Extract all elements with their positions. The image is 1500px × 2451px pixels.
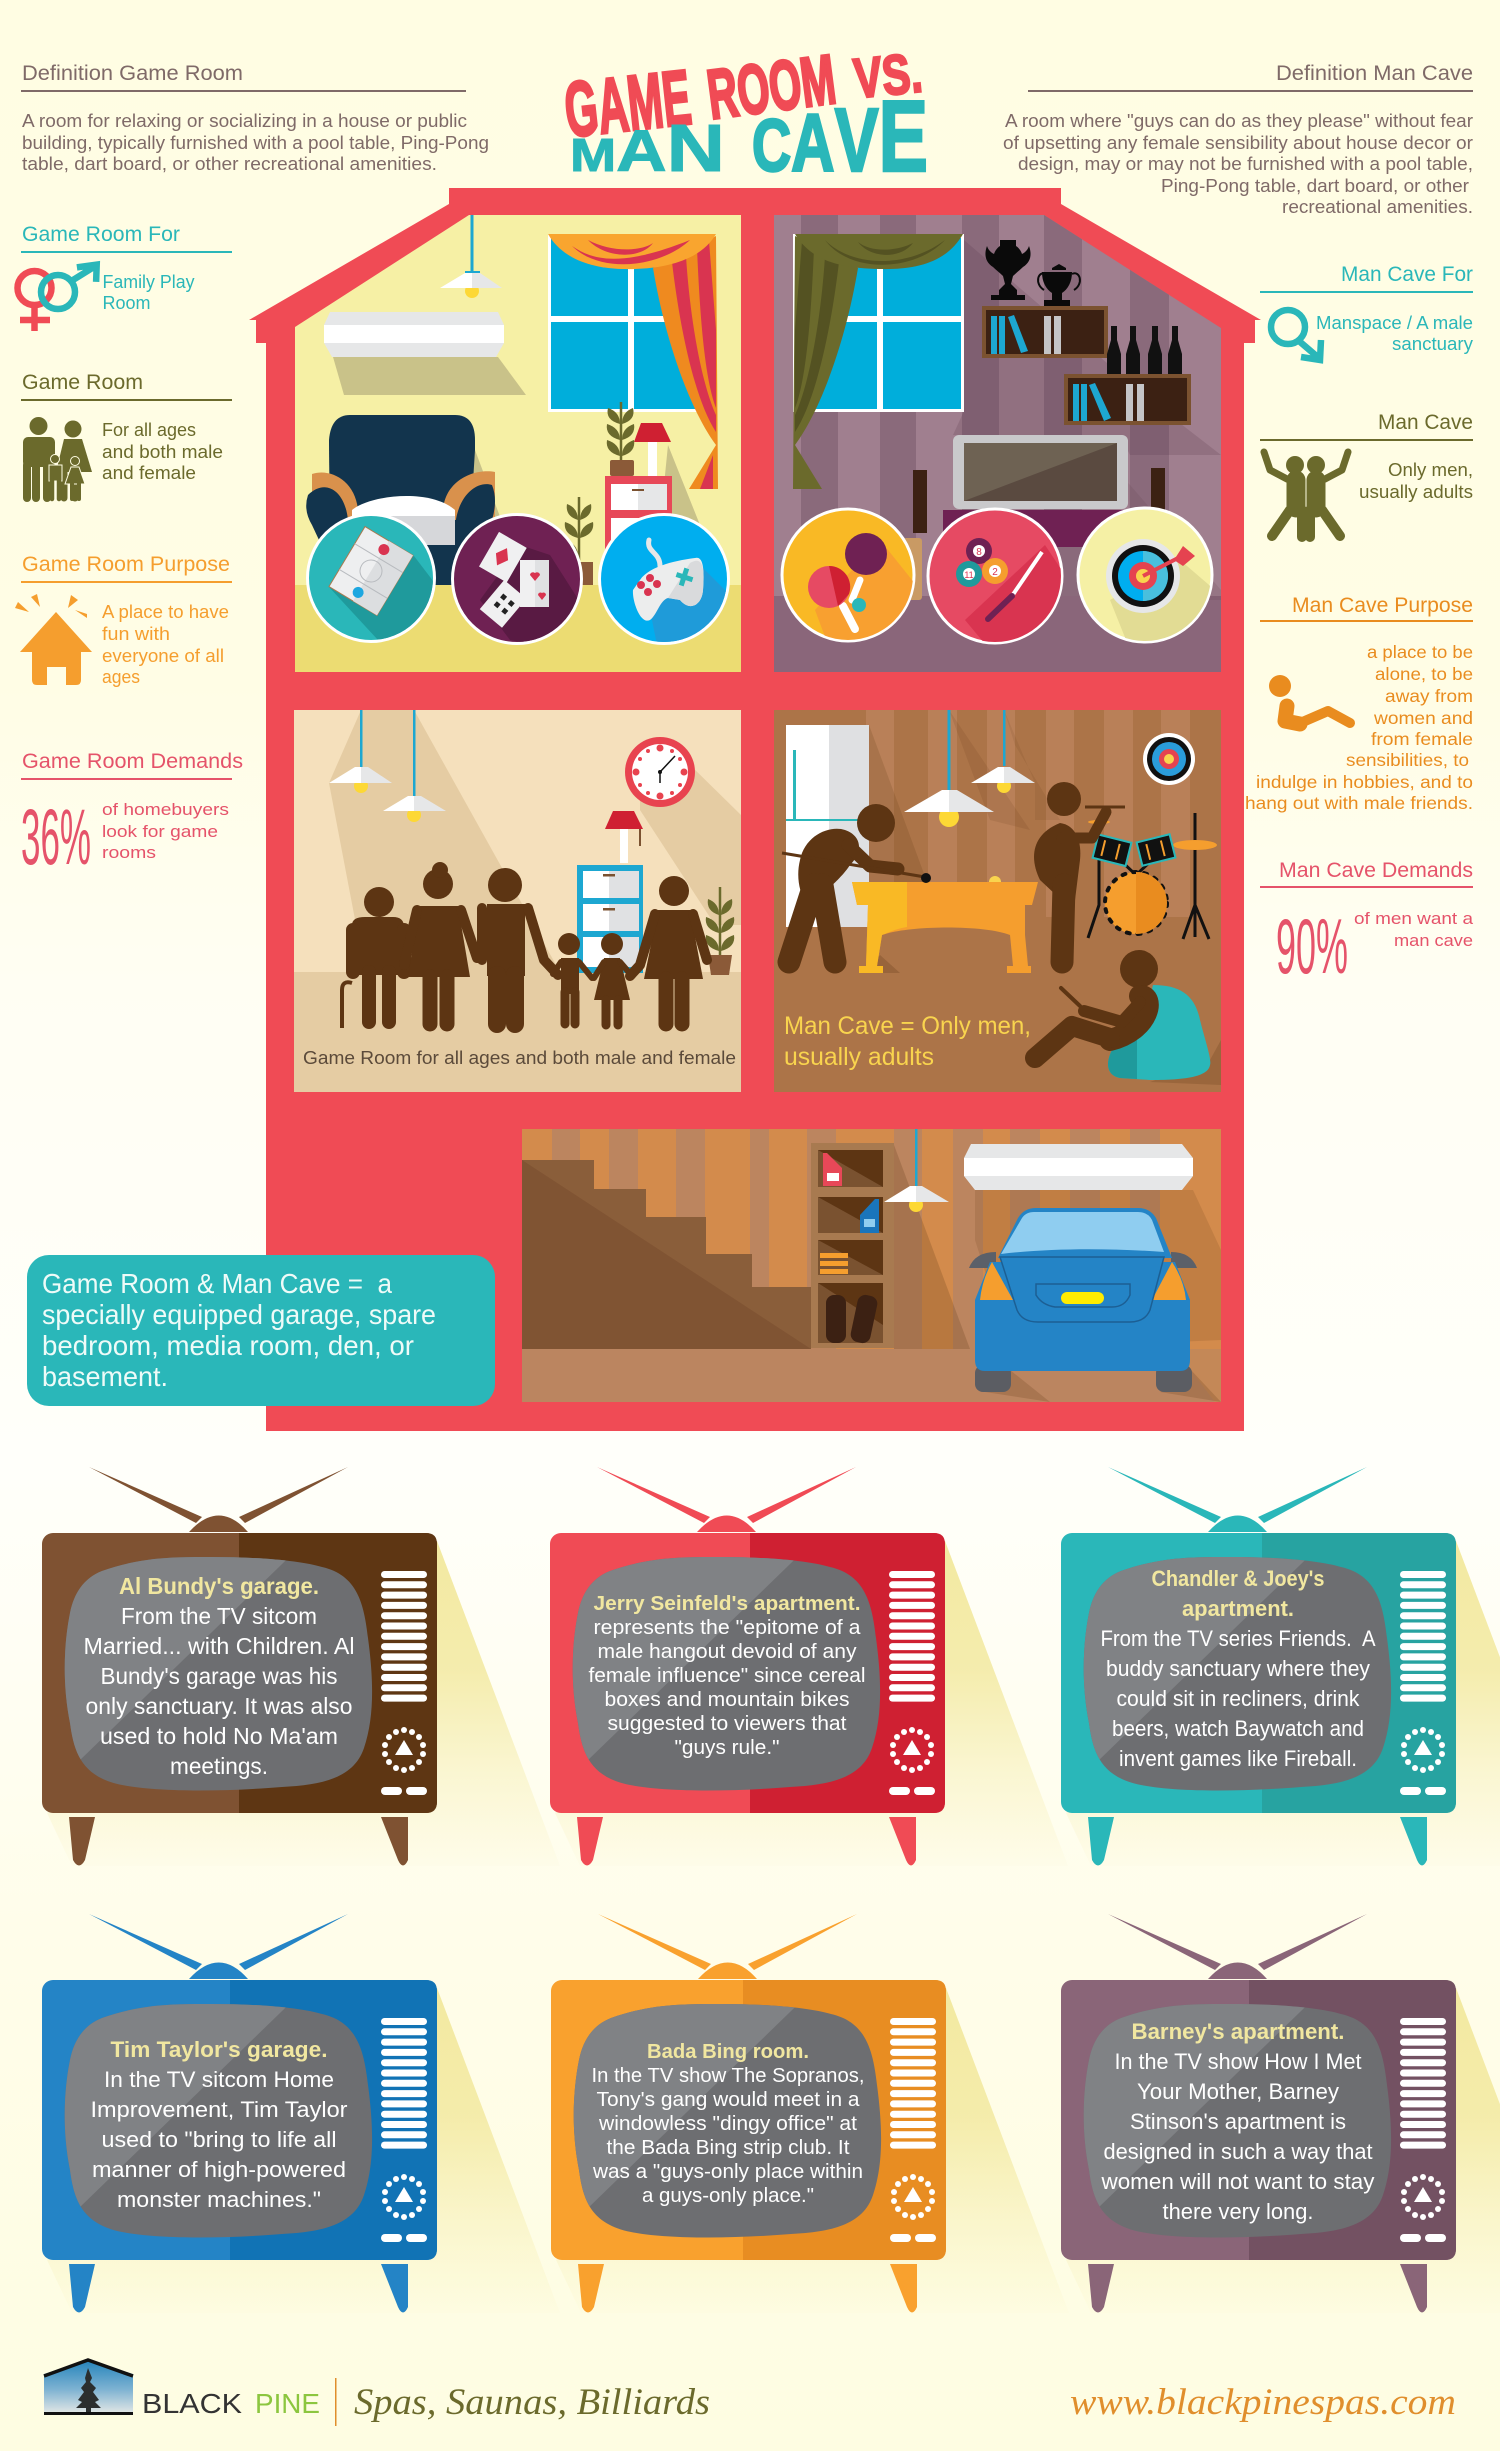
footer divider <box>335 2378 336 2426</box>
tv: Bada Bing: Tony's gang would meet in a <box>596 2088 860 2111</box>
pool table <box>852 876 1038 973</box>
room: man cave lounge <box>774 215 1221 672</box>
panel: man cave purpose: hang out with male friends. <box>1245 793 1473 813</box>
curtain <box>793 234 963 489</box>
tv: Al Bundy: used to hold No Ma'am <box>100 1723 338 1749</box>
bottles <box>1107 326 1182 375</box>
panel: man cave audience: usually adults <box>1359 482 1473 502</box>
tv: Jerry Seinfeld: represents the "epitome of a <box>594 1616 861 1639</box>
title: ROOM <box>703 40 840 134</box>
car <box>969 1208 1197 1392</box>
tv: Al Bundy: Married... with Children. Al <box>84 1633 355 1659</box>
panel: definition man cave <box>1003 62 1473 217</box>
panel: man cave audience: Only men, <box>1388 460 1473 480</box>
panel: man cave purpose: indulge in hobbies, and to <box>1256 772 1473 792</box>
tv: Tim Taylor: used to "bring to life all <box>102 2127 336 2152</box>
title: CAVE <box>752 81 928 193</box>
family silhouettes <box>342 862 707 1028</box>
badge: billiards: 8 <box>976 547 982 558</box>
man throwing dart <box>1034 782 1125 962</box>
tv: Al Bundy <box>42 1467 560 1866</box>
icon: house with rays <box>15 594 92 685</box>
panel: game room for <box>18 222 232 331</box>
armchair <box>306 415 505 585</box>
panel: game room audience: and female <box>102 463 196 483</box>
tv: Chandler and Joey: could sit in recliners, drink <box>1116 1686 1360 1711</box>
curtain <box>548 234 718 489</box>
floor plant <box>565 497 593 585</box>
title <box>560 40 928 193</box>
badge: game controller <box>598 513 730 645</box>
badge: playing cards <box>452 514 585 650</box>
man playing pool <box>782 804 931 962</box>
tv: Bada Bing: was a "guys-only place within <box>592 2160 863 2183</box>
tv: Barney: In the TV show How I Met <box>1114 2049 1362 2074</box>
panel: definition game room <box>21 62 489 174</box>
tv: Al Bundy: only sanctuary. It was also <box>86 1693 352 1719</box>
tv: Barney: there very long. <box>1162 2199 1314 2224</box>
window <box>548 234 713 412</box>
tv: Bada Bing: the Bada Bing strip club. It <box>606 2136 850 2159</box>
tv: Al Bundy: From the TV sitcom <box>121 1603 317 1629</box>
wall air conditioner <box>324 312 526 395</box>
tv: Bada Bing: In the TV show The Sopranos, <box>592 2064 864 2087</box>
tv: Barney: Your Mother, Barney <box>1137 2079 1339 2104</box>
panel: definition game room: Definition Game Room <box>22 62 243 85</box>
panel: man cave purpose: women and <box>1373 708 1473 728</box>
tv: Jerry Seinfeld: "guys rule." <box>674 1736 780 1759</box>
panel: game room audience: Game Room <box>22 370 143 394</box>
plant <box>706 887 734 975</box>
panel: definition game room: table, dart board, or other recreational amenities. <box>22 154 437 174</box>
room: game room with lounge <box>295 215 741 672</box>
tv: Jerry Seinfeld: female influence" since cereal <box>588 1664 866 1687</box>
caption: Man Cave = Only men, <box>784 1012 1031 1040</box>
panel: game room demands: of homebuyers <box>102 800 229 819</box>
tv: Jerry Seinfeld: suggested to viewers that <box>608 1712 847 1735</box>
tv: Al Bundy: Al Bundy's garage. <box>119 1573 319 1599</box>
room: man cave activities <box>774 710 1221 1092</box>
window <box>793 234 964 412</box>
panel: man cave for: Man Cave For <box>1341 262 1473 286</box>
tv: Jerry Seinfeld: male hangout devoid of any <box>598 1640 857 1663</box>
panel: game room demands: 36% <box>21 792 91 881</box>
wall shelf with books <box>984 308 1106 356</box>
footer logo <box>44 2360 320 2419</box>
badge: billiards: 11 <box>964 570 974 580</box>
callout: basement. <box>42 1361 168 1392</box>
tv: Chandler and Joey: buddy sanctuary where they <box>1106 1656 1370 1681</box>
icon: gender symbols <box>18 265 99 331</box>
cabinet and lamp <box>577 811 643 973</box>
panel: man cave demands: of men want a <box>1354 909 1474 928</box>
tv: Tim Taylor: Improvement, Tim Taylor <box>90 2097 348 2122</box>
panel: man cave purpose: sensibilities, to <box>1346 750 1469 770</box>
panel: game room audience <box>21 370 232 499</box>
tv: Bada Bing: a guys-only place." <box>642 2184 814 2207</box>
panel: definition man cave: recreational amenities. <box>1282 197 1473 217</box>
panel: game room audience: For all ages <box>102 420 196 440</box>
panel: game room for: Room <box>102 293 150 313</box>
tv: Barney: women will not want to stay <box>1100 2169 1374 2194</box>
badge: air hockey <box>306 516 436 643</box>
panel: man cave purpose: a place to be <box>1367 642 1473 662</box>
tv: Barney <box>1061 1914 1500 2313</box>
panel: game room demands <box>21 750 243 881</box>
tv: Tim Taylor: manner of high-powered <box>92 2157 346 2182</box>
badge: billiards: 2 <box>992 567 998 578</box>
tv: Barney: designed in such a way that <box>1104 2139 1372 2164</box>
panel: definition man cave: Ping-Pong table, dart board, or other <box>1161 176 1469 196</box>
tv: Al Bundy: Bundy's garage was his <box>100 1663 338 1689</box>
panel: game room demands: rooms <box>102 843 156 862</box>
panel: man cave for: Manspace / A male <box>1316 313 1473 333</box>
panel: man cave purpose: Man Cave Purpose <box>1292 593 1473 617</box>
panel: definition man cave: Definition Man Cave <box>1276 62 1473 85</box>
tv: Barney: Barney's apartment. <box>1132 2019 1344 2044</box>
wall shelf lower <box>1066 376 1189 423</box>
tv: Tim Taylor: In the TV sitcom Home <box>104 2067 334 2092</box>
footer logo: PINE <box>255 2388 320 2419</box>
panel: game room purpose: everyone of all <box>102 646 224 666</box>
panel: game room for: Game Room For <box>22 222 180 246</box>
shelving unit <box>811 1143 894 1348</box>
callout: specially equipped garage, spare <box>42 1299 436 1330</box>
television and speakers <box>903 435 1165 600</box>
tv: Jerry Seinfeld: Jerry Seinfeld's apartment. <box>594 1592 860 1615</box>
callout: Game Room & Man Cave = a <box>42 1268 393 1299</box>
panel: definition game room: A room for relaxing or socializing in a house or public <box>22 111 467 131</box>
callout <box>27 1255 495 1406</box>
lamps <box>329 710 446 822</box>
footer tagline: Spas, Saunas, Billiards <box>354 2382 710 2423</box>
badge: dartboard <box>1078 508 1215 650</box>
tv: Bada Bing: Bada Bing room. <box>647 2040 809 2063</box>
tv: Chandler and Joey <box>1061 1467 1500 1866</box>
icon: family <box>23 417 92 499</box>
dartboard <box>1143 733 1195 785</box>
tv: Chandler and Joey: invent games like Fireball. <box>1119 1746 1357 1771</box>
tv: Bada Bing: windowless "dingy office" at <box>598 2112 857 2135</box>
house <box>249 188 1261 1431</box>
panel: man cave purpose <box>1245 593 1473 813</box>
panel: definition man cave: of upsetting any female sensibility about house decor or <box>1003 133 1473 153</box>
caption: Game Room for all ages and both male and female <box>303 1047 736 1068</box>
icon: male symbol pointing down <box>1271 310 1321 360</box>
tv: Tim Taylor: monster machines." <box>117 2187 321 2212</box>
tv: Jerry Seinfeld: boxes and mountain bikes <box>604 1688 850 1711</box>
tv: Jerry Seinfeld <box>550 1467 1068 1866</box>
room: family game room <box>294 710 741 1092</box>
tv: Chandler and Joey: apartment. <box>1182 1596 1294 1621</box>
tv: Tim Taylor: Tim Taylor's garage. <box>110 2037 328 2062</box>
side table with lamp and plant <box>605 402 700 550</box>
panel: game room demands: Game Room Demands <box>22 750 243 773</box>
panel: game room for: Family Play <box>102 272 194 292</box>
panel: definition game room: building, typically furnished with a pool table, Ping-Pong <box>22 133 489 153</box>
tv: Tim Taylor <box>42 1914 560 2313</box>
footer website: www.blackpinespas.com <box>1070 2382 1456 2423</box>
refrigerator <box>786 725 869 927</box>
icon: two men <box>1264 452 1348 537</box>
wall clock <box>625 737 695 807</box>
hanging lamps <box>904 710 1035 827</box>
panel: game room purpose <box>15 552 232 687</box>
panel: man cave audience <box>1260 410 1473 537</box>
badge: billiards <box>928 509 1075 650</box>
panel: man cave demands: Man Cave Demands <box>1279 859 1473 882</box>
panel: game room purpose: ages <box>102 667 140 687</box>
panel: man cave demands <box>1260 859 1474 990</box>
badge: ping pong <box>782 509 920 650</box>
panel: game room purpose: fun with <box>102 624 170 644</box>
panel: man cave purpose: away from <box>1385 686 1473 706</box>
panel: definition man cave: design, may or may not be furnished with a pool table, <box>1018 154 1473 174</box>
caption: usually adults <box>784 1043 934 1071</box>
trophies <box>985 240 1080 308</box>
panel: game room audience: and both male <box>102 442 223 462</box>
title: GAME <box>560 53 695 154</box>
room: garage <box>522 1129 1221 1402</box>
tv: Chandler and Joey: beers, watch Baywatch and <box>1112 1716 1364 1741</box>
garage door box <box>964 1144 1193 1190</box>
tv: Chandler and Joey: Chandler & Joey's <box>1152 1566 1324 1591</box>
panel: man cave demands: 90% <box>1276 902 1348 990</box>
title: MAN <box>570 111 725 186</box>
title: VS. <box>851 40 925 110</box>
hanging lamp <box>884 1129 949 1212</box>
panel: man cave purpose: from female <box>1371 729 1473 749</box>
bean bag and seated man <box>1035 950 1221 1085</box>
panel: man cave for: sanctuary <box>1392 334 1473 354</box>
tv: Barney: Stinson's apartment is <box>1130 2109 1346 2134</box>
panel: man cave demands: man cave <box>1394 931 1473 950</box>
panel: game room purpose: A place to have <box>102 602 229 622</box>
panel: man cave purpose: alone, to be <box>1375 664 1473 684</box>
panel: game room purpose: Game Room Purpose <box>22 552 230 576</box>
panel: definition man cave: A room where "guys can do as they please" without fear <box>1005 111 1473 131</box>
caption <box>784 1012 1031 1071</box>
tv: Al Bundy: meetings. <box>170 1753 268 1779</box>
callout: bedroom, media room, den, or <box>42 1330 414 1361</box>
panel: man cave audience: Man Cave <box>1378 410 1473 434</box>
panel: man cave for <box>1260 262 1473 360</box>
lamp <box>440 215 502 298</box>
drum kit <box>1088 813 1217 939</box>
tv: Chandler and Joey: From the TV series Friends. A <box>1100 1626 1376 1651</box>
staircase <box>522 1160 811 1349</box>
icon: reclining man <box>1269 675 1350 724</box>
tv: Bada Bing <box>551 1914 1069 2313</box>
panel: game room demands: look for game <box>102 822 218 841</box>
footer logo: BLACK <box>142 2388 242 2419</box>
